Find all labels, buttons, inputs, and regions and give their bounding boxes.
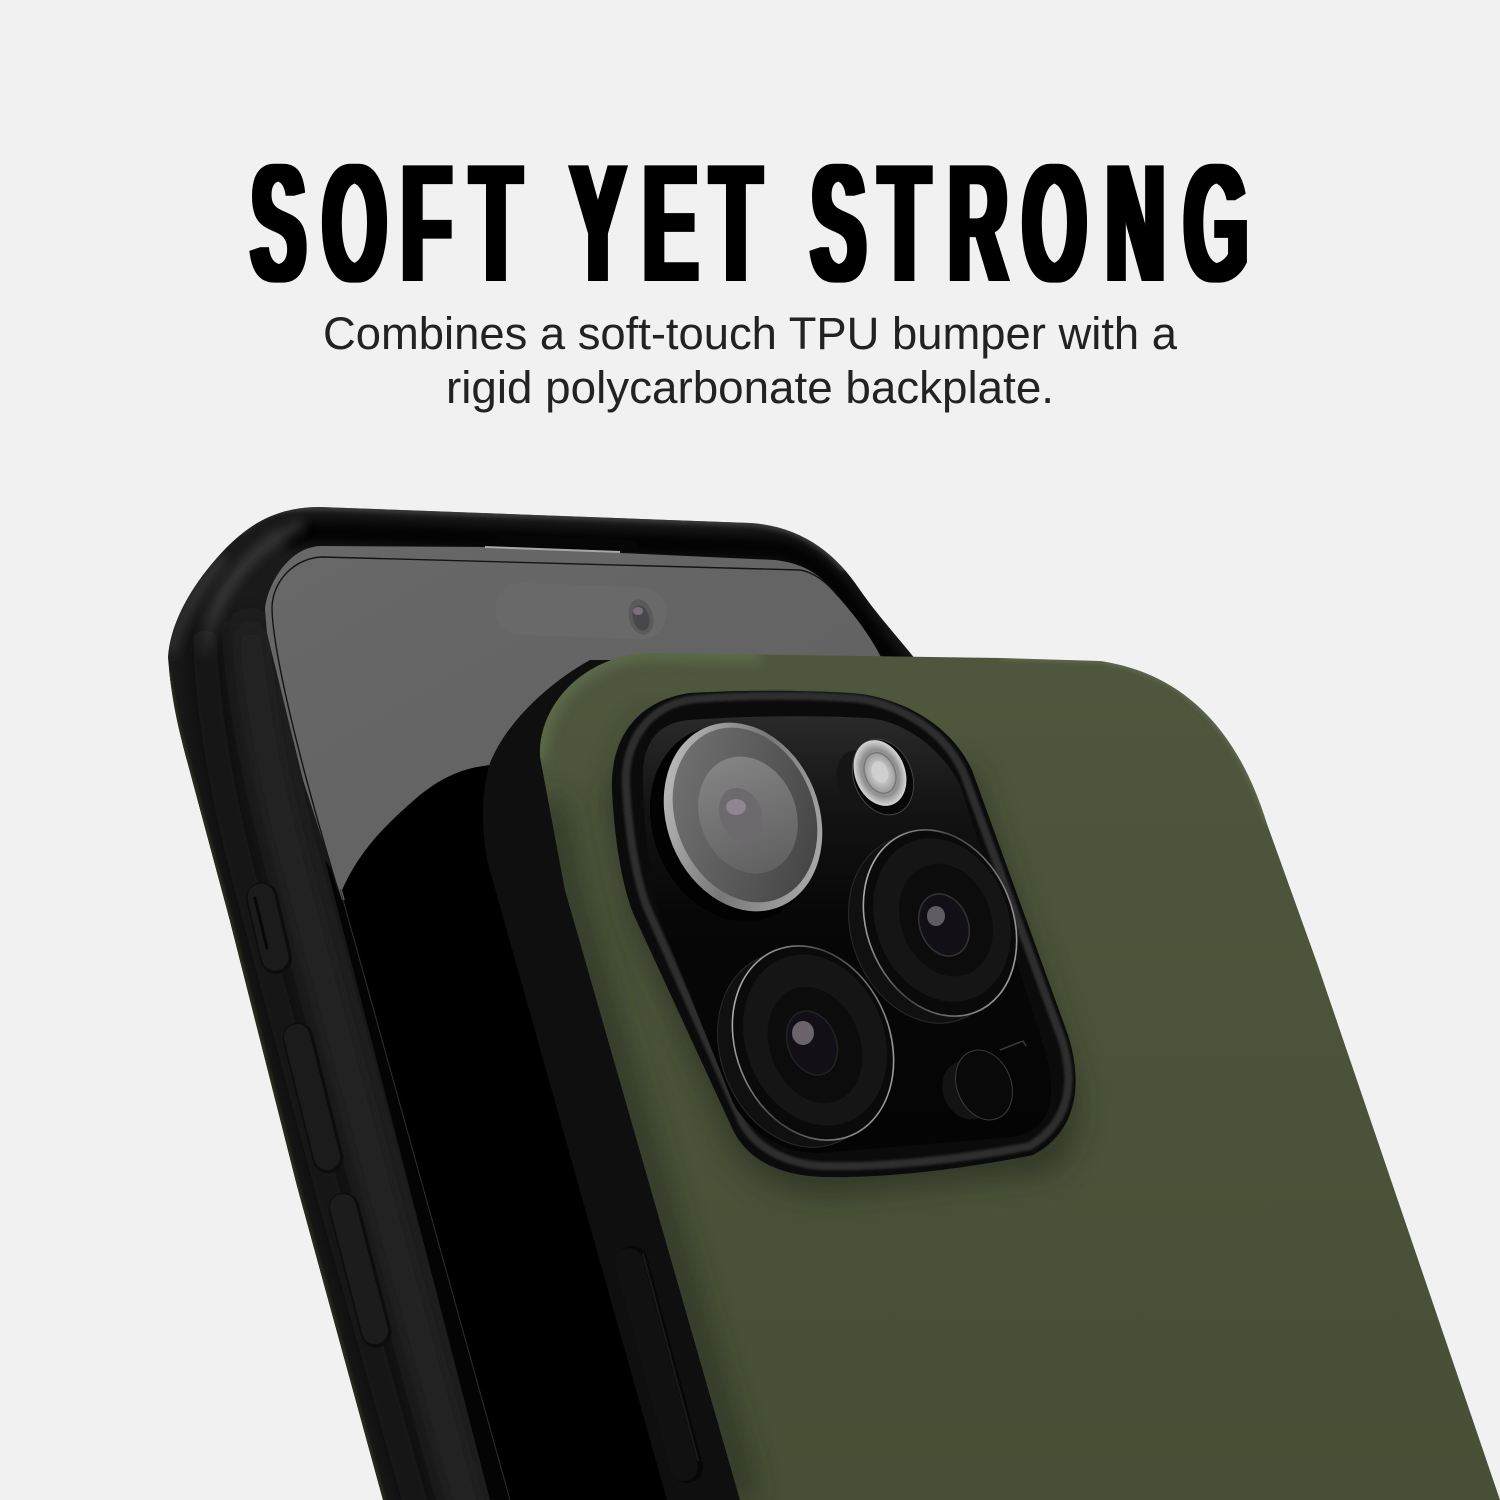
volume down button [343, 1207, 376, 1332]
back phone in black bumper, showing the screen [168, 507, 916, 1500]
bumper shading [168, 507, 900, 1500]
infographic canvas [168, 164, 1500, 1500]
dynamic island [494, 582, 668, 640]
camera module shadow [605, 720, 1080, 1196]
black interior [342, 760, 800, 1500]
camera glass [643, 716, 1051, 1153]
dark case side wall [483, 660, 800, 1500]
camera module [612, 691, 1076, 1177]
subtitle text [323, 308, 1178, 413]
black strip beside interior [325, 860, 515, 1500]
title: SOFT YET STRONG [251, 130, 1248, 318]
subtitle text: rigid polycarbonate backplate. [446, 362, 1054, 413]
action button [255, 897, 276, 958]
interior hairline [340, 889, 510, 1500]
title: SOFT YET STRONG: YET [571, 130, 761, 318]
speaker notch [488, 535, 640, 552]
camera surround outer [612, 691, 1076, 1177]
title: SOFT YET STRONG: SOFT [251, 130, 521, 318]
flash [827, 730, 924, 824]
olive case back [540, 653, 1500, 1500]
screen inner border line [272, 557, 838, 890]
earpiece highlight [485, 547, 620, 552]
front camera [625, 597, 657, 637]
lower wide lens [689, 921, 922, 1172]
main lens [621, 699, 850, 947]
title: SOFT YET STRONG: STRONG [811, 130, 1248, 318]
volume up button [297, 1037, 328, 1158]
right telephoto lens [821, 807, 1044, 1047]
subtitle text: Combines a soft-touch TPU bumper with a [323, 308, 1178, 359]
lidar sensor [934, 1041, 1026, 1128]
surround raised lip [626, 696, 1068, 1166]
power button [629, 1254, 698, 1467]
phone screen glass [265, 546, 885, 900]
case shading [538, 651, 1267, 1500]
bumper body [168, 507, 916, 1500]
front phone with olive case [483, 651, 1500, 1500]
